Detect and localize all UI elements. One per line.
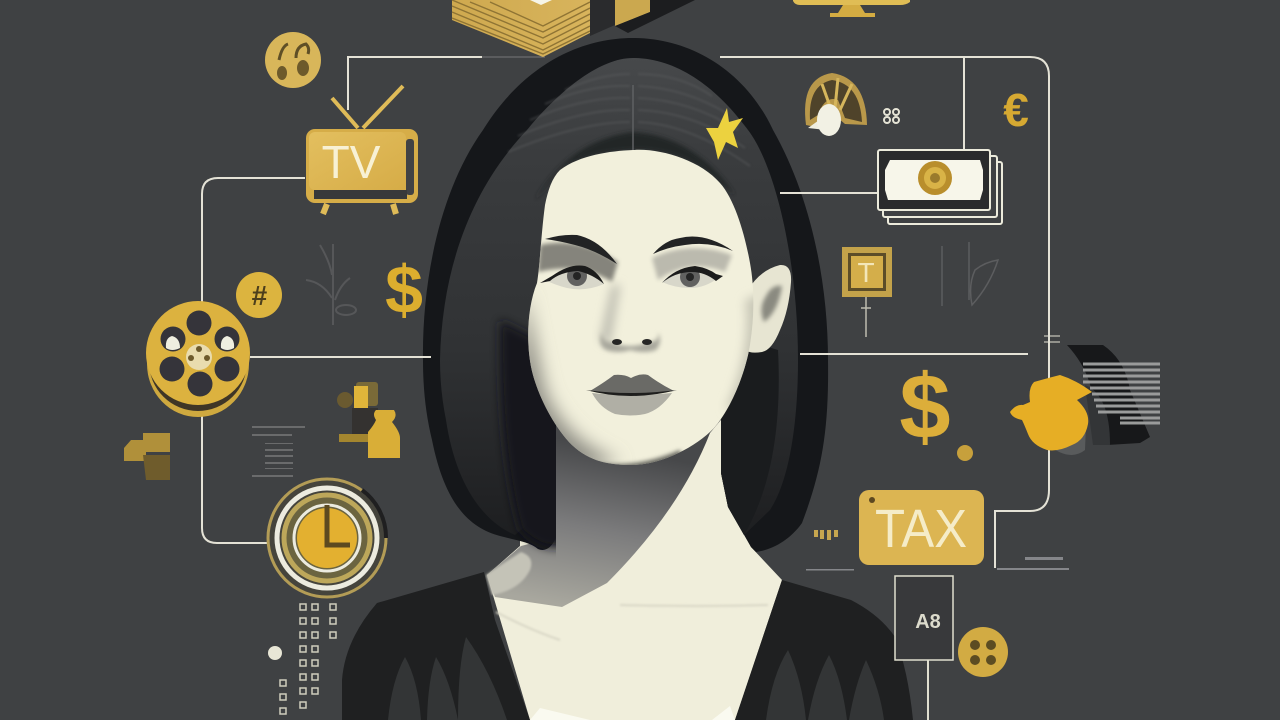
icon: stacked gold box — [452, 0, 695, 57]
shoulder highlight — [486, 552, 531, 595]
icon: framed T sign: T — [857, 257, 875, 288]
dark hair near hairline — [535, 132, 735, 200]
blouse — [342, 572, 913, 720]
icon: dollar sign right: $ — [899, 356, 951, 458]
woman portrait — [342, 38, 913, 720]
hair strands — [508, 74, 750, 166]
right eye — [662, 266, 723, 288]
text block: faded lines — [252, 426, 305, 477]
tax badge — [859, 490, 984, 565]
right eyebrow — [653, 237, 733, 254]
lips — [586, 374, 677, 416]
icon: banknote stack — [878, 150, 1002, 224]
hair outer band — [423, 38, 828, 552]
face — [528, 150, 754, 465]
icon: framed T sign — [842, 247, 892, 337]
icon: hashtag coin — [236, 272, 282, 318]
icon: clock — [268, 479, 386, 597]
icon: small gear — [957, 445, 973, 461]
left eye — [540, 265, 604, 289]
tax badge: TAX — [875, 499, 967, 559]
icon: monitor top — [793, 0, 910, 17]
icon: dark striped block — [1048, 345, 1160, 455]
icon: dollar sign left: $ — [385, 252, 423, 328]
icon: bottom coin — [958, 627, 1008, 677]
icon: small flower — [884, 109, 899, 123]
small mark left of tax — [814, 530, 838, 540]
icon: film reel — [146, 301, 250, 417]
ear — [746, 265, 791, 353]
icon: coin top left — [265, 32, 321, 88]
hair dark strip left — [500, 320, 570, 548]
card: A8 outline — [895, 576, 953, 720]
nose — [600, 332, 660, 352]
hair parting — [632, 85, 634, 150]
icon: TV — [306, 86, 418, 214]
bright chest bottom — [530, 706, 735, 720]
icon: small gold figure far left — [124, 433, 170, 480]
connector lines — [202, 57, 1060, 568]
icon: TV: TV — [322, 136, 381, 188]
neck and chest — [487, 400, 782, 720]
icon: faded plant left — [306, 244, 356, 325]
hair dark strip right — [721, 340, 779, 535]
text block: vertical code column — [280, 604, 336, 714]
icon: hashtag coin: # — [251, 280, 267, 311]
hair inner — [440, 58, 798, 535]
icon: euro: € — [1003, 84, 1029, 136]
icon: gold piggy — [1010, 375, 1092, 450]
face shading — [528, 240, 754, 465]
icon: gold bottle cluster — [337, 382, 400, 458]
left eyebrow — [545, 235, 617, 264]
neck shadow — [487, 415, 725, 607]
blouse folds — [388, 637, 884, 720]
icon: faded plant right — [942, 242, 998, 306]
icon: gold hair clip star — [706, 108, 743, 160]
collarbone — [496, 605, 768, 640]
icon: gold fan coin right — [805, 73, 867, 136]
underline rules — [806, 557, 1069, 570]
icon: small dot — [268, 646, 282, 660]
card: A8 outline: A8 — [915, 611, 941, 633]
